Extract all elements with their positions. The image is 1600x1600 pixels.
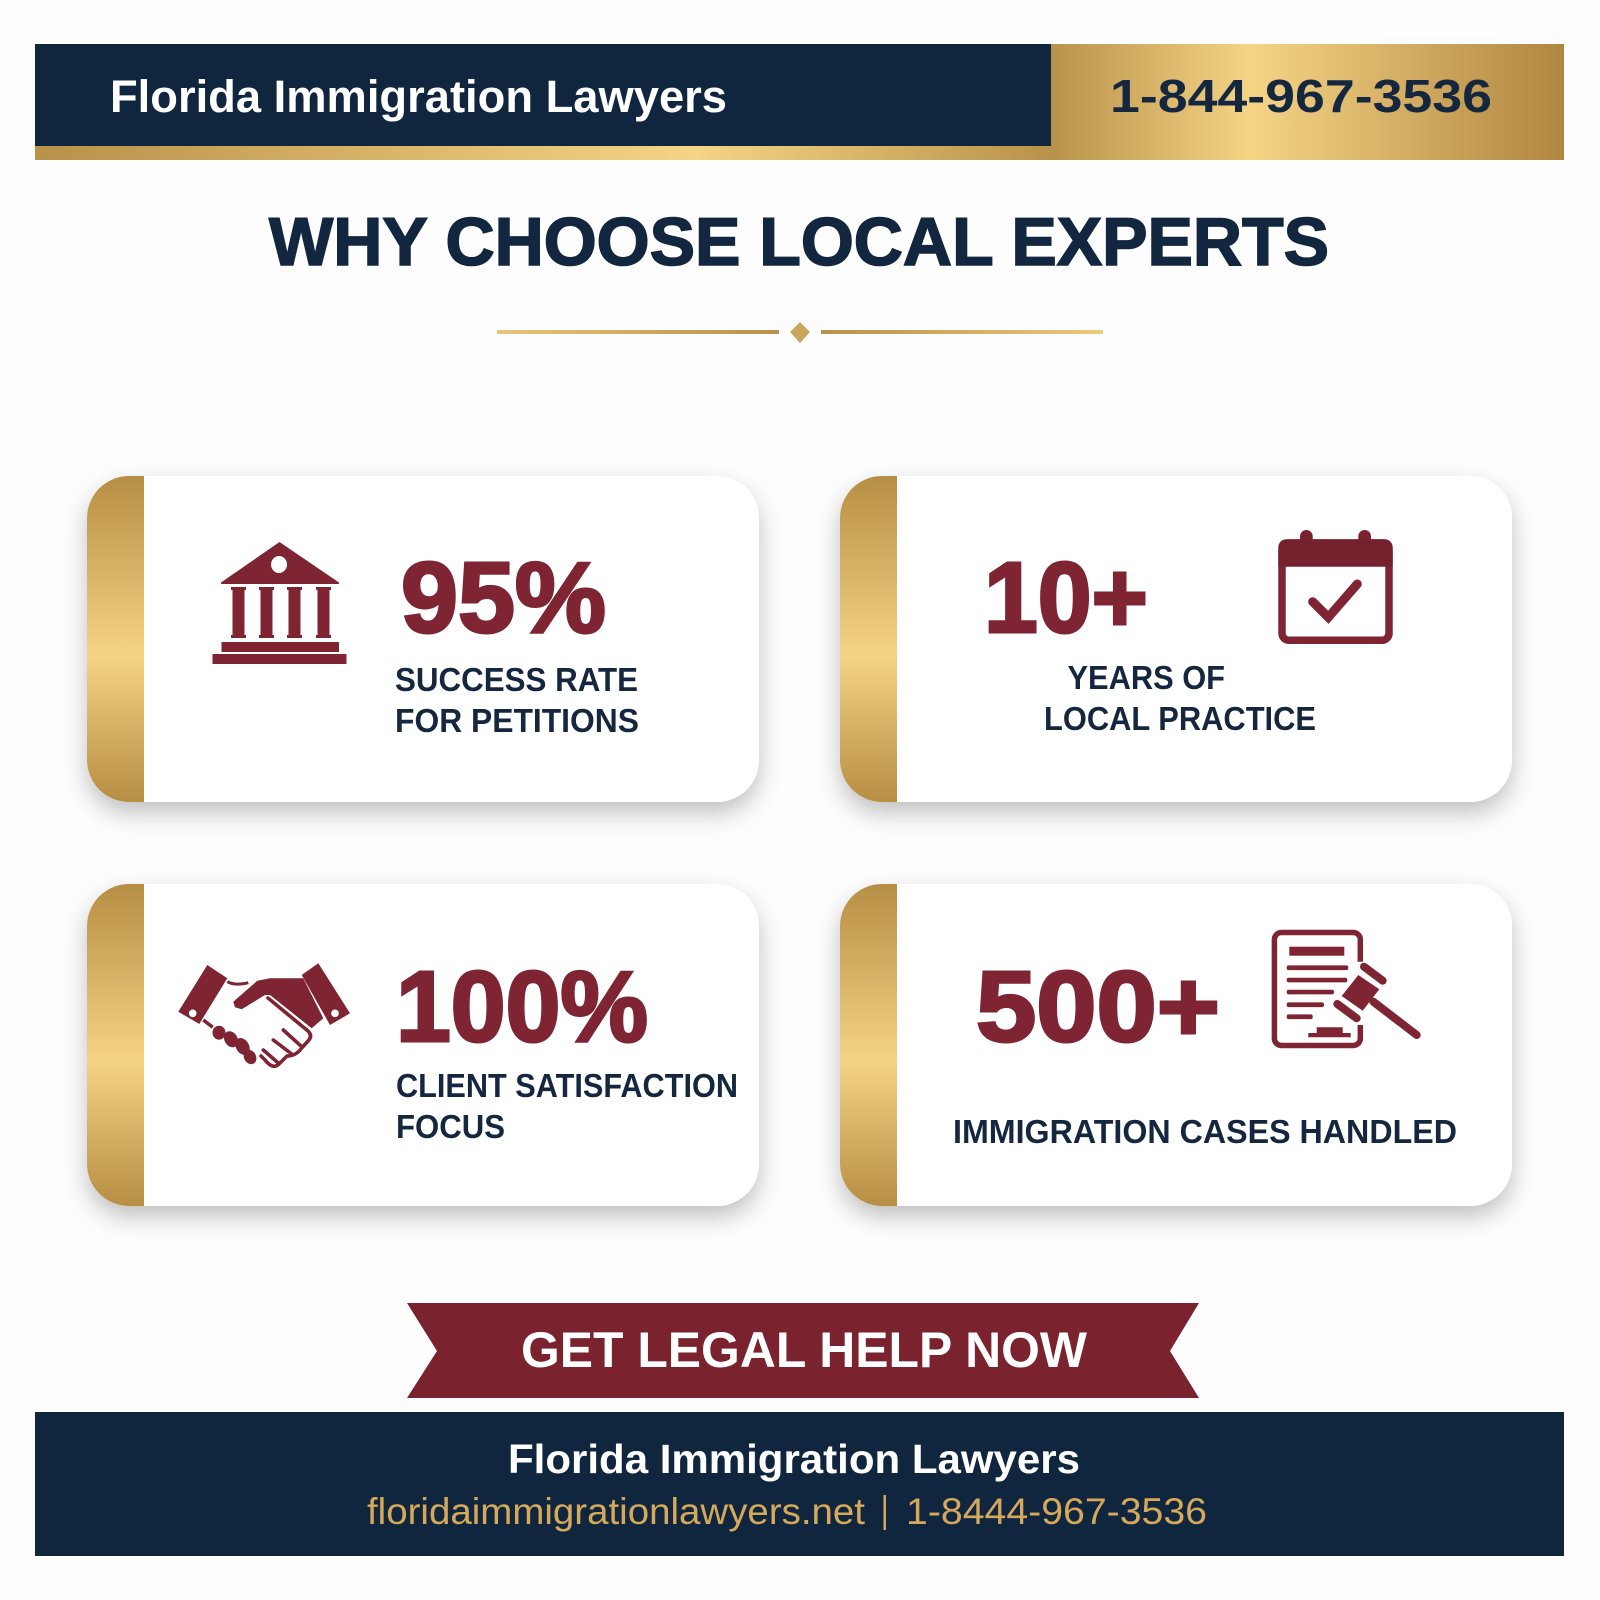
stat label line 2: LOCAL PRACTICE	[1044, 701, 1316, 738]
panel: 500+ cases	[840, 884, 1512, 1206]
header firm name: Florida Immigration Lawyers	[110, 71, 727, 122]
panel: 10+ years	[840, 476, 1512, 802]
footer separator	[884, 1495, 886, 1530]
gold stripe	[87, 884, 144, 1206]
gold stripe	[87, 476, 144, 802]
stat label: YEARS OF	[1068, 660, 1225, 697]
header bar	[35, 44, 1564, 160]
header gold phone panel	[1051, 44, 1564, 160]
call to action ribbon	[407, 1303, 1199, 1398]
icon: calendar with check	[1278, 530, 1393, 640]
panel: 95% success rate	[87, 476, 759, 802]
footer firm name: Florida Immigration Lawyers	[508, 1436, 1080, 1482]
icon: document with gavel	[1274, 932, 1417, 1046]
icon: courthouse	[212, 542, 346, 664]
stat value: 100%	[396, 951, 648, 1063]
gold stripe	[840, 476, 897, 802]
stat label line 2: FOCUS	[396, 1109, 505, 1146]
stat value: 10+	[984, 542, 1148, 654]
title divider with diamond	[497, 322, 1103, 343]
gold stripe	[840, 884, 897, 1206]
icon: handshake	[178, 963, 350, 1066]
panel: 100% client satisfaction	[87, 884, 759, 1206]
footer bar	[35, 1412, 1564, 1556]
ribbon text: GET LEGAL HELP NOW	[521, 1322, 1088, 1378]
footer website: floridaimmigrationlawyers.net	[367, 1491, 866, 1532]
stat value: 95%	[401, 542, 606, 654]
stat label line 2: FOR PETITIONS	[395, 703, 639, 740]
stat label: IMMIGRATION CASES HANDLED	[953, 1114, 1457, 1151]
header navy panel	[35, 44, 1051, 146]
footer phone: 1-8444-967-3536	[906, 1491, 1207, 1532]
stat label: SUCCESS RATE	[395, 662, 638, 699]
stat label: CLIENT SATISFACTION	[396, 1068, 738, 1105]
title: WHY CHOOSE LOCAL EXPERTS	[269, 204, 1329, 280]
header phone number: 1-844-967-3536	[1110, 70, 1492, 122]
stat value: 500+	[976, 951, 1220, 1063]
